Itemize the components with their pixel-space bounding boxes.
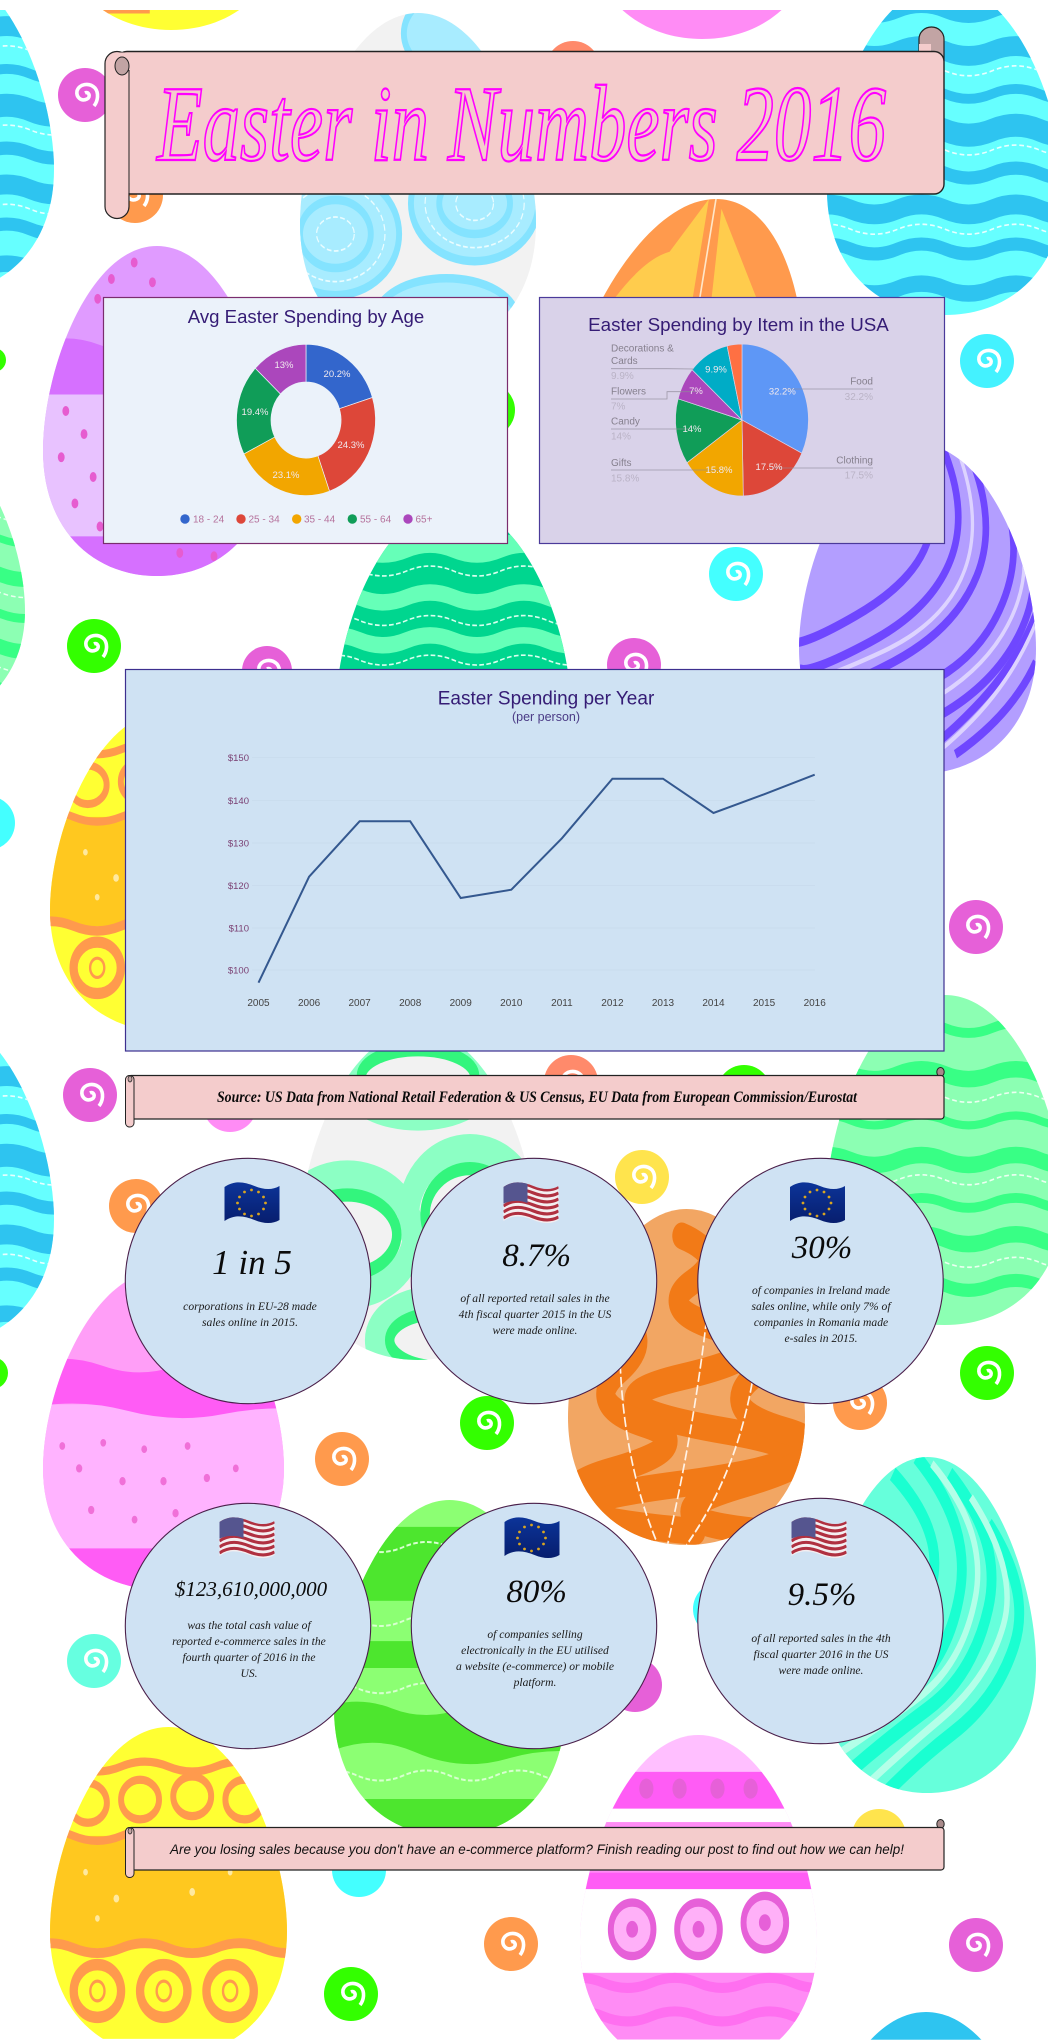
stat value: 30%	[791, 1230, 852, 1266]
egg: orange leaf	[568, 1209, 805, 1545]
description	[751, 1632, 891, 1677]
x axis labels: 2005	[247, 998, 270, 1009]
pie value labels: 32.2%	[769, 386, 796, 398]
pie outer labels: 17.5%	[845, 470, 873, 482]
description: of companies in Ireland made	[752, 1284, 890, 1297]
description	[751, 1284, 892, 1345]
egg: grey with green spirals	[308, 1052, 524, 1360]
description: of all reported sales in the 4th	[751, 1632, 891, 1645]
egg: cyan top right	[827, 10, 1048, 315]
egg: yellow left middle	[50, 727, 125, 1025]
description: fiscal quarter 2016 in the US	[754, 1648, 889, 1661]
description: was the total cash value of	[187, 1619, 312, 1632]
stat bubble: 30%	[698, 1158, 943, 1404]
description: of companies selling	[487, 1628, 583, 1641]
icon: US flag	[502, 1178, 562, 1228]
legend: 55 - 64	[360, 514, 392, 526]
y axis labels: $130	[228, 838, 249, 850]
pie outer labels: 9.9%	[611, 371, 634, 382]
description	[459, 1292, 612, 1337]
pie outer labels: Food	[850, 376, 873, 388]
chart heading: Easter Spending per Year	[438, 688, 655, 710]
pie value labels: 14%	[682, 424, 702, 435]
stat value: 9.5%	[788, 1577, 856, 1613]
description: sales online, while only 7% of	[751, 1300, 892, 1313]
egg: yellow bottom left	[50, 1727, 287, 2039]
donut labels: 13%	[274, 360, 294, 371]
source banner scroll	[126, 1068, 944, 1127]
x axis labels: 2011	[551, 998, 573, 1009]
pie value labels	[682, 364, 796, 476]
egg: teal green middle	[340, 532, 568, 669]
egg: blue top left	[0, 10, 54, 278]
description	[183, 1300, 317, 1329]
pie outer labels: Flowers	[611, 386, 646, 398]
chart subheading: (per person)	[512, 710, 580, 724]
x axis labels: 2014	[702, 998, 725, 1009]
stat bubble: 8.7%	[411, 1158, 657, 1404]
egg: blue bottom right	[870, 2012, 982, 2040]
description: platform.	[513, 1676, 556, 1689]
pie outer labels: 32.2%	[845, 392, 873, 403]
description: companies in Romania made	[754, 1316, 888, 1329]
pie outer labels: Gifts	[611, 458, 632, 469]
egg: green right lower	[830, 995, 1048, 1325]
pie value labels: 9.9%	[705, 364, 727, 376]
icon: EU flag	[224, 1182, 280, 1223]
pie value labels: 17.5%	[756, 462, 783, 473]
y axis labels	[228, 753, 249, 976]
pie outer labels: Clothing	[836, 456, 873, 466]
stat value: 1 in 5	[212, 1243, 292, 1282]
pie outer labels: Candy	[611, 416, 640, 428]
x axis labels: 2008	[399, 998, 422, 1009]
description: a website (e-commerce) or mobile	[456, 1660, 614, 1673]
stat bubble: 80%	[411, 1503, 657, 1749]
description: were made online.	[779, 1664, 863, 1677]
stat value: 80%	[506, 1574, 567, 1610]
donut labels: 19.4%	[242, 407, 269, 418]
description: of all reported retail sales in the	[460, 1292, 610, 1305]
source text: Source: US Data from National Retail Federation & US Census, EU Data from European Commission/Eurostat	[217, 1089, 857, 1106]
x axis labels: 2016	[804, 998, 826, 1009]
donut labels	[242, 360, 365, 481]
pie outer labels: 7%	[611, 402, 626, 412]
donut labels: 20.2%	[324, 369, 351, 380]
egg: orange yellow	[603, 199, 797, 297]
legend	[180, 514, 433, 526]
egg: teal right lower	[838, 1457, 1036, 1793]
egg: pink top	[622, 10, 782, 39]
icon: EU flag	[504, 1517, 560, 1558]
pie outer labels: Cards	[611, 356, 638, 367]
pie value labels: 7%	[689, 386, 703, 397]
egg: violet right	[799, 450, 1036, 772]
description: reported e-commerce sales in the	[172, 1635, 326, 1648]
panel: avg easter spending by age	[104, 298, 508, 544]
description: US.	[240, 1667, 258, 1680]
x axis labels: 2015	[753, 998, 776, 1009]
stat bubble: 9.5%	[698, 1498, 943, 1744]
egg: green bottom middle	[334, 1500, 561, 1827]
icon: US flag	[218, 1513, 278, 1563]
egg: purple	[43, 246, 237, 576]
egg: yellow top	[103, 10, 239, 30]
egg: blue left lower	[0, 1053, 54, 1328]
donut labels: 24.3%	[338, 440, 365, 451]
call to action banner scroll	[126, 1820, 944, 1878]
egg: pink left lower	[43, 1282, 284, 1586]
y axis labels: $120	[228, 881, 249, 892]
description: sales online in 2015.	[202, 1316, 298, 1329]
icon: US flag	[790, 1513, 850, 1563]
x axis labels: 2006	[298, 998, 321, 1009]
y axis labels: $100	[228, 966, 249, 976]
description: corporations in EU-28 made	[183, 1300, 317, 1313]
legend: 35 - 44	[304, 514, 336, 526]
egg: grey with blue spirals	[300, 13, 536, 312]
panel heading: Easter Spending by Item in the USA	[588, 314, 889, 335]
stat value: $123,610,000,000	[175, 1577, 328, 1601]
description: electronically in the EU utilised	[461, 1644, 609, 1657]
egg: pink bottom middle	[580, 1735, 817, 2040]
description: 4th fiscal quarter 2015 in the US	[459, 1308, 612, 1321]
stat value: 8.7%	[502, 1238, 571, 1274]
stat bubble: $123,610,000,000	[125, 1503, 371, 1749]
pie outer labels: 15.8%	[611, 474, 639, 484]
description	[456, 1628, 614, 1689]
donut labels: 23.1%	[273, 470, 300, 481]
x axis labels	[247, 998, 826, 1009]
y axis labels: $110	[229, 924, 249, 934]
pie chart	[675, 344, 808, 496]
pie value labels: 15.8%	[706, 465, 733, 476]
x axis labels: 2012	[601, 998, 624, 1009]
pie outer labels	[611, 344, 873, 484]
panel: easter spending per year	[126, 670, 944, 1051]
egg: green left	[0, 506, 25, 686]
pie outer labels: Decorations &	[611, 344, 674, 354]
panel heading: Avg Easter Spending by Age	[188, 306, 424, 327]
description	[172, 1619, 326, 1680]
panel: easter spending by item	[540, 298, 944, 544]
line chart	[228, 753, 826, 1009]
legend: 25 - 34	[248, 514, 280, 526]
description: fourth quarter of 2016 in the	[182, 1651, 316, 1664]
x axis labels: 2009	[450, 998, 472, 1009]
y axis labels: $140	[228, 796, 249, 807]
icon: EU flag	[790, 1182, 845, 1223]
x axis labels: 2013	[652, 998, 675, 1009]
call to action text: Are you losing sales because you don't have an e-commerce platform? Finish reading our post to find out how we can help!	[169, 1841, 904, 1857]
x axis labels: 2010	[500, 998, 523, 1009]
legend: 65+	[416, 514, 433, 526]
pie outer labels: 14%	[611, 432, 631, 442]
legend: 18 - 24	[193, 514, 225, 526]
y axis labels: $150	[228, 753, 249, 764]
stat bubble: 1 in 5	[125, 1158, 371, 1404]
description: were made online.	[493, 1324, 577, 1337]
description: e-sales in 2015.	[784, 1332, 858, 1345]
title banner scroll	[105, 27, 944, 218]
pie leader lines	[611, 369, 873, 470]
x axis labels: 2007	[348, 998, 371, 1009]
donut chart	[237, 344, 376, 496]
